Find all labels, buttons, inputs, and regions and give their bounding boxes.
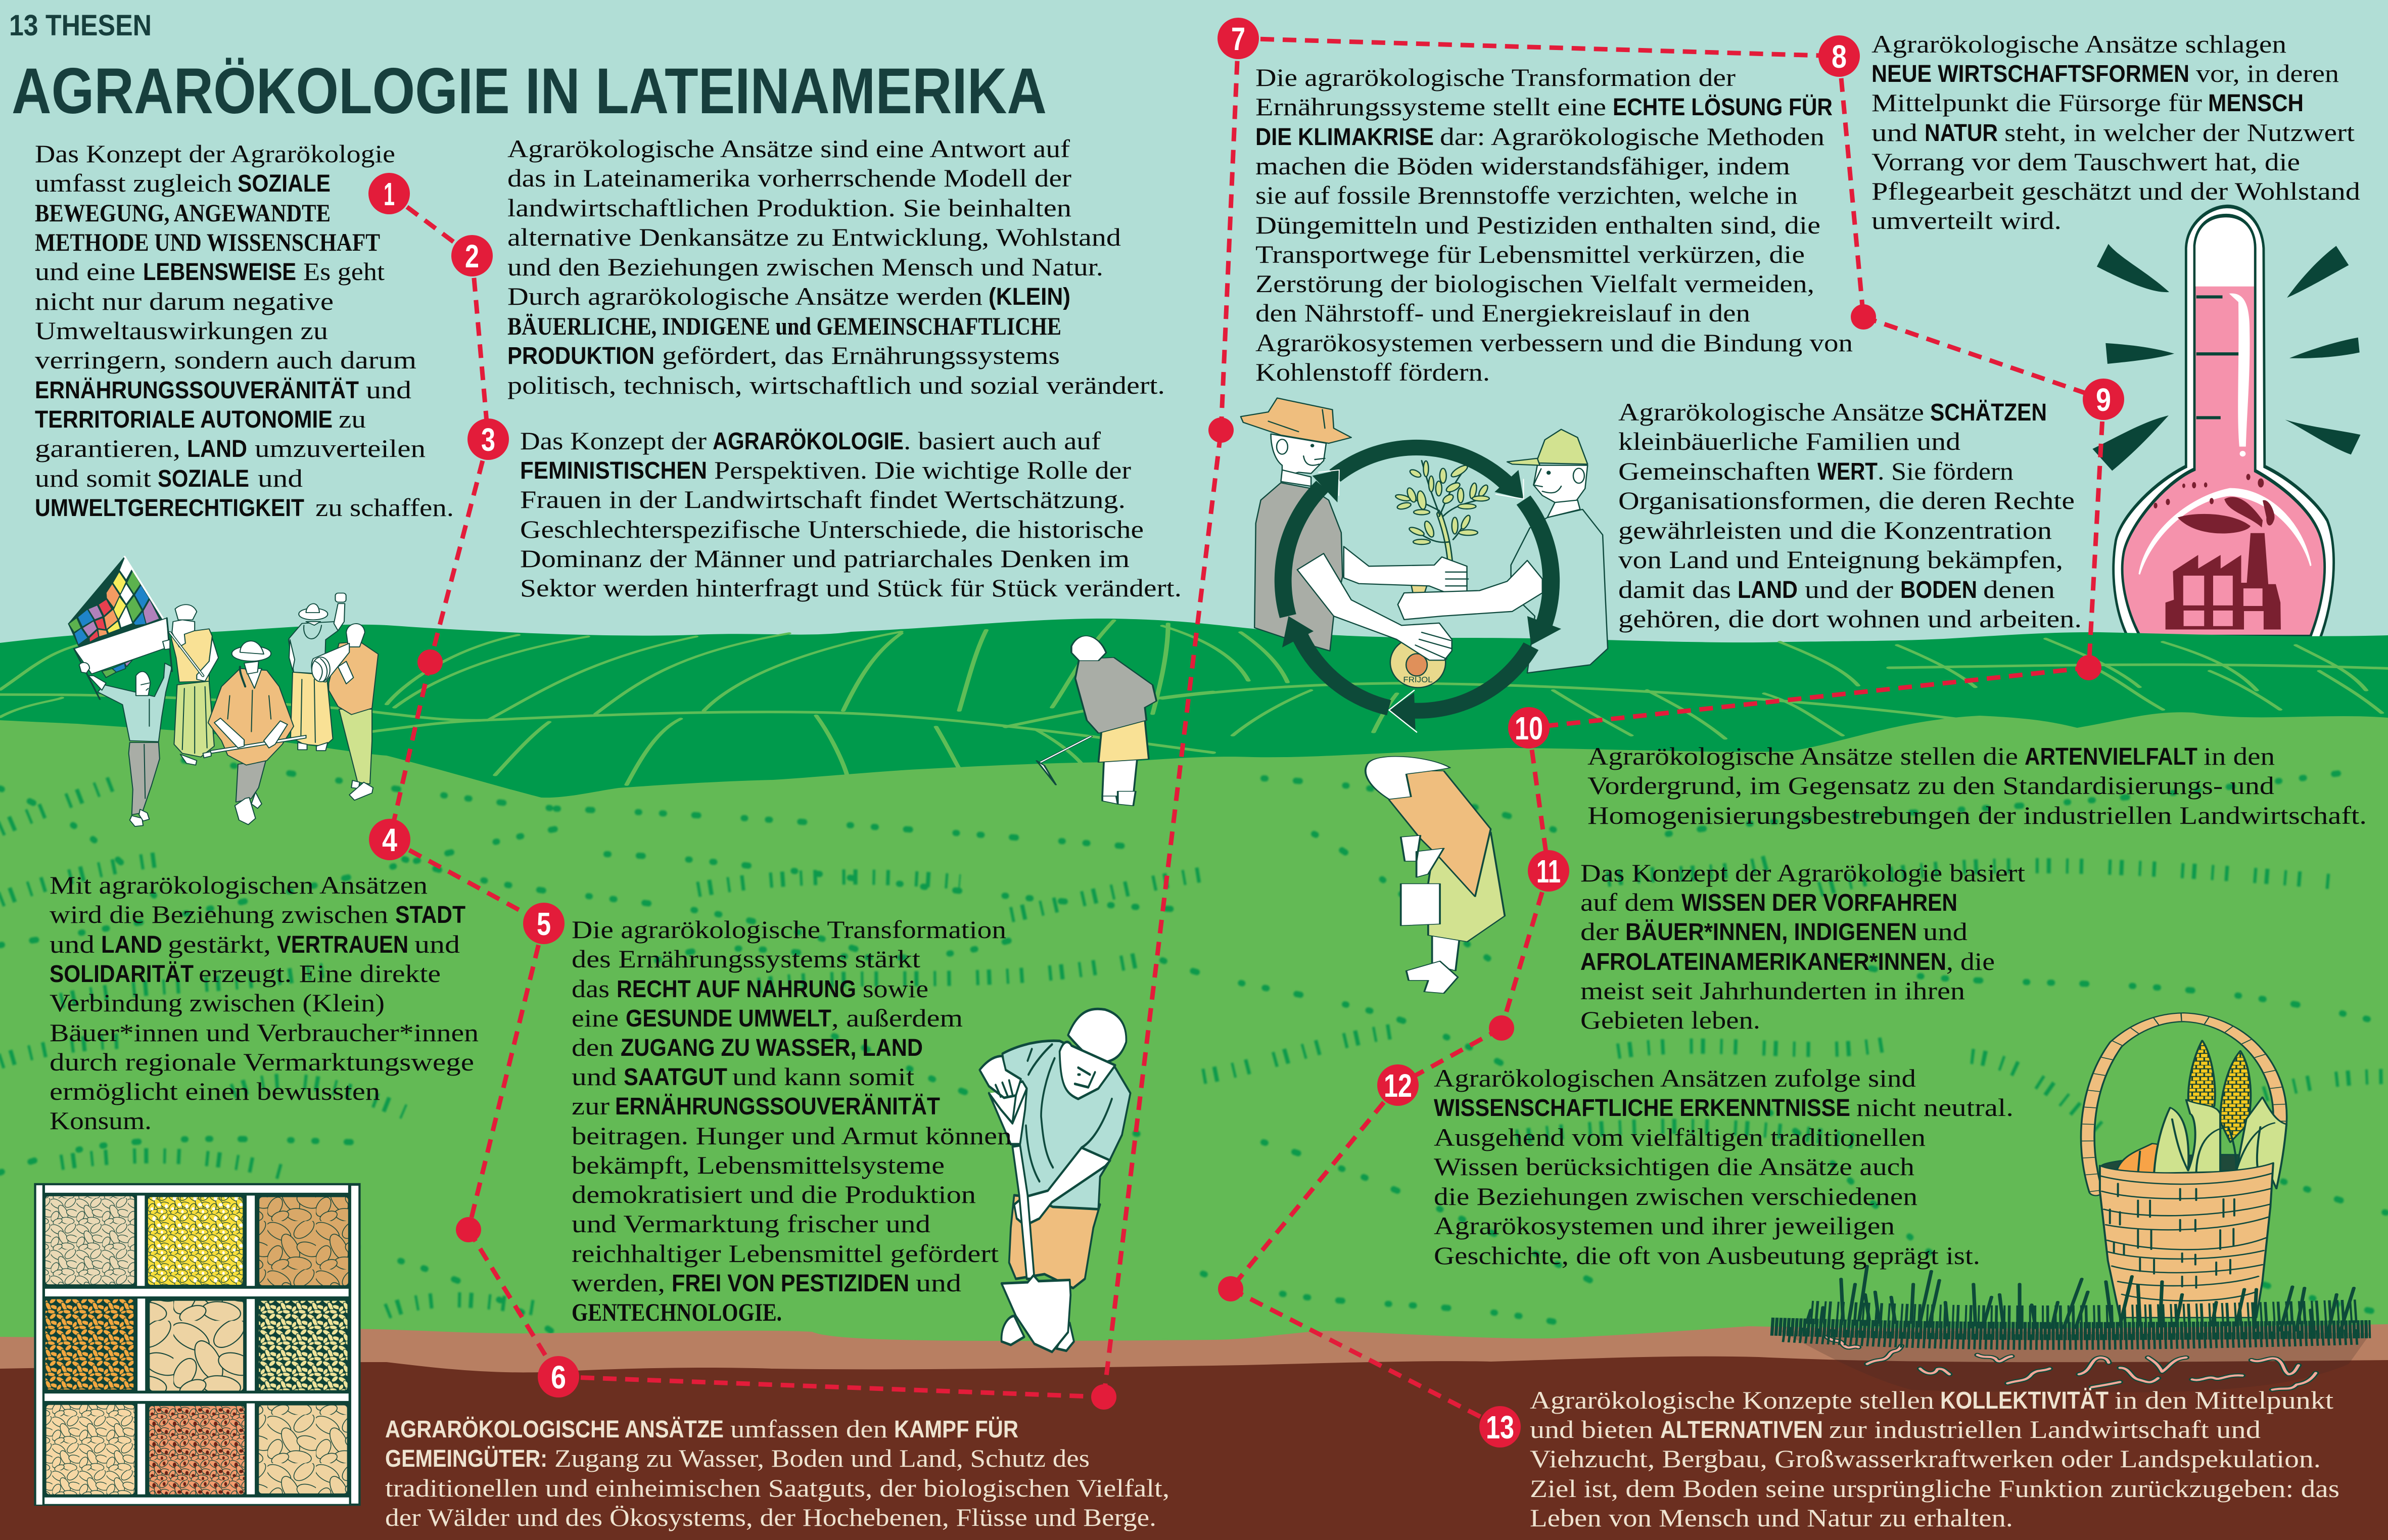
text block: thesis 7: Zerstörung der biologischen Vielfalt vermeiden, bbox=[1255, 269, 1814, 298]
text block: thesis 5: ZUGANG ZU WASSER, LAND bbox=[621, 1035, 923, 1061]
banner bbox=[74, 618, 172, 699]
text block: thesis 5: werden, bbox=[572, 1269, 665, 1297]
farmer right bbox=[1507, 430, 1608, 673]
text block: thesis 11: der bbox=[1580, 917, 1619, 946]
text block: thesis 9: kleinbäuerliche Familien und bbox=[1618, 427, 1960, 455]
illustration: woman with bucket bbox=[1366, 757, 1505, 993]
text block: thesis 6: KAMPF FÜR bbox=[894, 1416, 1018, 1443]
text block: thesis 1: verringern, sondern auch darum bbox=[35, 346, 416, 374]
text block: thesis 9: Agrarökologische Ansätze bbox=[1618, 398, 1924, 426]
text block: thesis 5: den bbox=[572, 1033, 614, 1061]
background: dark green hill field bbox=[0, 619, 2388, 859]
illustration: seed box bbox=[34, 1183, 361, 1506]
person: woman with staff bbox=[170, 604, 218, 765]
text block: thesis 7: sie auf fossile Brennstoffe verzichten, welche in bbox=[1255, 181, 1798, 209]
text block: thesis 12: Geschichte, die oft von Ausbeutung geprägt ist. bbox=[1434, 1241, 1980, 1270]
illustration: basket with corn and squash, grass and worms bbox=[1771, 1017, 2371, 1392]
text block: thesis 7 bbox=[1255, 63, 1853, 386]
text block: thesis 9 bbox=[1618, 398, 2082, 633]
text block: thesis 13: Ziel ist, dem Boden seine ursprüngliche Funktion zurückzugeben: das bbox=[1530, 1474, 2339, 1503]
soil patch bbox=[1779, 1330, 2371, 1392]
text block: thesis 8: Pflegearbeit geschätzt und der Wohlstand bbox=[1871, 177, 2360, 205]
number badge 4 bbox=[369, 819, 410, 860]
text block: thesis 5: und bbox=[916, 1269, 961, 1297]
text block: thesis 3: AGRARÖKOLOGIE bbox=[713, 428, 904, 455]
text block: thesis 5: das bbox=[572, 974, 610, 1003]
text block: thesis 7: Agrarökosystemen verbessern und die Bindung von bbox=[1255, 329, 1853, 357]
number badge 9 bbox=[2083, 379, 2124, 420]
text block: thesis 4: und bbox=[50, 930, 95, 958]
number badge 9: 9 bbox=[2096, 382, 2111, 418]
text block: thesis 7: ECHTE LÖSUNG FÜR bbox=[1613, 94, 1833, 121]
text block: thesis 5: RECHT AUF NAHRUNG bbox=[617, 976, 856, 1003]
text block: thesis 2: (KLEIN) bbox=[989, 284, 1070, 310]
text block: thesis 11: Gebieten leben. bbox=[1580, 1006, 1760, 1034]
grass tufts bbox=[1771, 1266, 2371, 1342]
text block: thesis 10: in den bbox=[2204, 742, 2275, 770]
kicker: 13 Thesen: 13 THESEN bbox=[9, 9, 152, 42]
text block: thesis 1: nicht nur darum negative bbox=[35, 287, 334, 315]
dashed route connecting theses bbox=[389, 38, 2103, 1427]
text block: thesis 3: Sektor werden hinterfragt und Stück für Stück verändert. bbox=[520, 574, 1182, 602]
text block: thesis 6: GEMEINGÜTER: bbox=[385, 1445, 547, 1472]
text block: thesis 5: ERNÄHRUNGSSOUVERÄNITÄT bbox=[615, 1093, 940, 1120]
text block: thesis 8: Agrarökologische Ansätze schlagen bbox=[1871, 30, 2286, 58]
text block: thesis 12 bbox=[1434, 1064, 2014, 1270]
text block: thesis 9: SCHÄTZEN bbox=[1930, 399, 2047, 426]
illustration: man with shovel bbox=[979, 1009, 1131, 1352]
text block: thesis 9: denen bbox=[1983, 575, 2055, 603]
text block: thesis 5: GESUNDE UMWELT bbox=[626, 1005, 831, 1032]
text block: thesis 13: ALTERNATIVEN bbox=[1660, 1417, 1823, 1443]
text block: thesis 1 bbox=[35, 139, 454, 522]
text block: thesis 6: umfassen den bbox=[730, 1415, 887, 1443]
text block: thesis 7: Ernährungssysteme stellt eine bbox=[1255, 92, 1606, 121]
text block: thesis 4: wird die Beziehung zwischen bbox=[50, 900, 388, 928]
text block: thesis 3: . basiert auch auf bbox=[904, 427, 1101, 455]
text block: thesis 7: den Nährstoff- und Energiekreislauf in den bbox=[1255, 299, 1750, 327]
text block: thesis 4: durch regionale Vermarktungswege bbox=[50, 1048, 474, 1076]
text block: thesis 7: Transportwege für Lebensmittel verkürzen, die bbox=[1255, 240, 1805, 268]
text block: thesis 2: gefördert, das Ernährungssystems bbox=[662, 341, 1060, 369]
seed bag bbox=[1390, 570, 1445, 687]
route waypoints bbox=[417, 304, 2101, 1410]
text block: thesis 5: Die agrarökologische Transformation bbox=[572, 915, 1006, 944]
text block: thesis 5: reichhaltiger Lebensmittel gefördert bbox=[572, 1239, 999, 1268]
text block: thesis 1: und bbox=[258, 464, 303, 492]
text block: thesis 4: Konsum. bbox=[50, 1106, 152, 1135]
text block: thesis 5: FREI VON PESTIZIDEN bbox=[672, 1270, 909, 1297]
text block: thesis 7: Düngemitteln und Pestiziden enthalten sind, die bbox=[1255, 211, 1820, 239]
field furrow lines bbox=[0, 621, 2388, 785]
text block: thesis 11: meist seit Jahrhunderten in ihren bbox=[1580, 976, 1965, 1005]
text block: thesis 3: Perspektiven. Die wichtige Rolle der bbox=[714, 456, 1131, 484]
number badge 13: 13 bbox=[1486, 1409, 1514, 1445]
text block: thesis 1: Es geht bbox=[303, 257, 385, 286]
sapling bbox=[1395, 460, 1489, 568]
text block: thesis 1: und somit bbox=[35, 464, 151, 492]
text block: thesis 1: BEWEGUNG, ANGEWANDTE bbox=[35, 199, 331, 227]
text block: thesis 6: AGRARÖKOLOGISCHE ANSÄTZE bbox=[385, 1416, 724, 1443]
text block: thesis 8: vor, in deren bbox=[2196, 59, 2339, 87]
number badge 7: 7 bbox=[1231, 21, 1245, 57]
illustration: two farmers exchanging sapling and seed bag bbox=[1241, 398, 1608, 732]
text block: thesis 1: ERNÄHRUNGSSOUVERÄNITÄT bbox=[35, 377, 359, 404]
text block: thesis 2: das in Lateinamerika vorherrschende Modell der bbox=[507, 164, 1071, 192]
text block: thesis 4: gestärkt, bbox=[168, 930, 271, 958]
person: man with megaphone bbox=[311, 624, 378, 800]
text block: thesis 10: Vordergrund, im Gegensatz zu den Standardisierungs- und bbox=[1587, 771, 2274, 800]
text block: thesis 13: in den Mittelpunkt bbox=[2115, 1386, 2333, 1414]
text block: thesis 8 bbox=[1871, 30, 2360, 235]
number badge 3: 3 bbox=[481, 422, 495, 458]
number badge 6 bbox=[538, 1356, 579, 1397]
text block: thesis 2: alternative Denkansätze zu Entwicklung, Wohlstand bbox=[507, 223, 1121, 251]
number badge 6: 6 bbox=[551, 1359, 566, 1395]
clasped hands and arms bbox=[1297, 546, 1542, 660]
text block: thesis 6: der Wälder und des Ökosystems, der Hochebenen, Flüsse und Berge. bbox=[385, 1503, 1156, 1531]
text block: thesis 2: PRODUKTION bbox=[507, 343, 654, 369]
text block: thesis 9: Organisationsformen, die deren Rechte bbox=[1618, 486, 2075, 515]
text block: thesis 1: zu bbox=[339, 405, 366, 433]
text block: thesis 6 bbox=[385, 1415, 1169, 1531]
text block: thesis 9: gewährleisten und die Konzentration bbox=[1618, 516, 2052, 544]
text block: thesis 3: FEMINISTISCHEN bbox=[520, 457, 707, 484]
number badge 7 bbox=[1218, 18, 1259, 59]
text block: thesis 2 bbox=[507, 134, 1165, 399]
text block: thesis 2: BÄUERLICHE, INDIGENE und GEMEINSCHAFTLICHE bbox=[507, 312, 1061, 340]
text block: thesis 7: Kohlenstoff fördern. bbox=[1255, 358, 1490, 386]
text block: thesis 12: nicht neutral. bbox=[1856, 1093, 2014, 1122]
text block: thesis 8: MENSCH bbox=[2208, 90, 2304, 117]
text block: thesis 9: Gemeinschaften bbox=[1618, 457, 1810, 485]
text block: thesis 4: VERTRAUEN bbox=[277, 931, 408, 958]
text block: thesis 1: METHODE UND WISSENSCHAFT bbox=[35, 228, 380, 256]
text block: thesis 2: Agrarökologische Ansätze sind eine Antwort auf bbox=[507, 134, 1070, 163]
text block: thesis 5: bekämpft, Lebensmittelsysteme bbox=[572, 1151, 945, 1179]
text block: thesis 1: umzuverteilen bbox=[255, 434, 426, 462]
text block: thesis 5: SAATGUT bbox=[624, 1064, 727, 1091]
text block: thesis 1: und eine bbox=[35, 257, 135, 286]
text block: thesis 10 bbox=[1587, 742, 2367, 829]
text block: thesis 1: und bbox=[366, 376, 411, 404]
text block: thesis 8: NATUR bbox=[1925, 120, 1998, 147]
icon: cycle arrows bbox=[1282, 447, 1561, 732]
text block: thesis 3: Geschlechterspezifische Unterschiede, die historische bbox=[520, 515, 1144, 543]
text block: thesis 13: KOLLEKTIVITÄT bbox=[1940, 1387, 2109, 1414]
illustration: thermometer with factory bbox=[2092, 206, 2361, 639]
text block: thesis 4: ermöglicht einen bewussten bbox=[50, 1077, 380, 1105]
text block: thesis 7: Die agrarökologische Transformation der bbox=[1255, 63, 1736, 91]
text block: thesis 5: und Vermarktung frischer und bbox=[572, 1209, 930, 1238]
text block: thesis 9: und der bbox=[1805, 575, 1893, 603]
text block: thesis 9: BODEN bbox=[1900, 577, 1977, 603]
text block: thesis 4: STADT bbox=[395, 902, 465, 928]
text block: thesis 12: Agrarökologischen Ansätzen zufolge sind bbox=[1434, 1064, 1916, 1092]
basket bbox=[2088, 1017, 2286, 1318]
person: woman with raised fist bbox=[289, 593, 346, 751]
text block: thesis 8: steht, in welcher der Nutzwert bbox=[2004, 118, 2355, 147]
text block: thesis 13: Agrarökologische Konzepte stellen bbox=[1530, 1386, 1934, 1414]
text block: thesis 5 bbox=[572, 915, 1012, 1326]
number badge 8 bbox=[1818, 35, 1860, 77]
illustration: woman with hoe bbox=[1037, 636, 1156, 806]
text block: thesis 7: dar: Agrarökologische Methoden bbox=[1440, 122, 1824, 151]
text block: thesis 5: sowie bbox=[863, 974, 928, 1003]
text block: thesis 10: Homogenisierungsbestrebungen der industriellen Landwirtschaft. bbox=[1587, 801, 2367, 829]
text block: thesis 12: WISSENSCHAFTLICHE ERKENNTNISSE bbox=[1434, 1095, 1850, 1122]
text block: thesis 1: LEBENSWEISE bbox=[143, 259, 296, 286]
text block: thesis 1: garantieren, bbox=[35, 434, 180, 462]
text block: thesis 12: die Beziehungen zwischen verschiedenen bbox=[1434, 1182, 1917, 1210]
title: AGRARÖKOLOGIE IN LATEINAMERIKA bbox=[12, 55, 1047, 127]
text block: thesis 1: LAND bbox=[187, 436, 247, 462]
text block: thesis 11 bbox=[1580, 859, 2025, 1034]
number badge 2 bbox=[451, 235, 493, 276]
text block: thesis 5: beitragen. Hunger und Armut können bbox=[572, 1122, 1012, 1150]
farmer left bbox=[1241, 398, 1351, 651]
number badge 11: 11 bbox=[1536, 853, 1561, 890]
text block: thesis 1: SOZIALE bbox=[238, 170, 331, 197]
text block: thesis 5: und kann somit bbox=[732, 1062, 914, 1091]
text block: thesis 4: LAND bbox=[101, 931, 162, 958]
seed bag: FRIJOL bbox=[1403, 675, 1433, 684]
text block: thesis 6: traditionellen und einheimischen Saatguts, der biologischen Vielfalt, bbox=[385, 1474, 1169, 1502]
text block: thesis 4: Verbindung zwischen (Klein) bbox=[50, 989, 385, 1017]
number badge 1: 1 bbox=[384, 176, 395, 212]
text block: thesis 10: ARTENVIELFALT bbox=[2025, 743, 2197, 770]
number badge 8: 8 bbox=[1832, 38, 1847, 75]
number badge 5 bbox=[523, 903, 565, 944]
text block: thesis 2: und den Beziehungen zwischen Mensch und Natur. bbox=[507, 253, 1103, 281]
number badge 11 bbox=[1528, 850, 1569, 892]
text block: thesis 11: Das Konzept der Agrarökologie basiert bbox=[1580, 859, 2025, 887]
person: banner carrier bbox=[88, 663, 172, 826]
number badge 12: 12 bbox=[1384, 1067, 1412, 1104]
text block: thesis 5: demokratisiert und die Produktion bbox=[572, 1180, 976, 1208]
text block: thesis 8: Mittelpunkt die Fürsorge für bbox=[1871, 88, 2202, 117]
text block: thesis 8: NEUE WIRTSCHAFTSFORMEN bbox=[1871, 61, 2189, 87]
text block: thesis 11: , die bbox=[1946, 947, 1995, 975]
text block: thesis 7: machen die Böden widerstandsfähiger, indem bbox=[1255, 152, 1790, 180]
text block: thesis 12: Agrarökosystemen und ihrer jeweiligen bbox=[1434, 1211, 1895, 1240]
text block: thesis 1: zu schaffen. bbox=[315, 493, 454, 522]
text block: thesis 2: politisch, technisch, wirtschaftlich und sozial verändert. bbox=[507, 371, 1165, 399]
text block: thesis 5: zur bbox=[572, 1092, 610, 1120]
text block: thesis 12: Wissen berücksichtigen die Ansätze auch bbox=[1434, 1152, 1914, 1181]
background: tan topsoil band bbox=[0, 1324, 2388, 1415]
text block: thesis 4: Mit agrarökologischen Ansätzen bbox=[50, 871, 428, 899]
text block: thesis 1: TERRITORIALE AUTONOMIE bbox=[35, 406, 333, 433]
text block: thesis 4: und bbox=[414, 930, 460, 958]
text block: thesis 4 bbox=[50, 871, 479, 1135]
number badge 10: 10 bbox=[1515, 710, 1543, 746]
icon: heat rays bbox=[2092, 244, 2361, 471]
text block: thesis 8: und bbox=[1871, 118, 1917, 147]
number badge 4: 4 bbox=[382, 822, 397, 858]
number badge 1 bbox=[368, 173, 410, 214]
text block: thesis 9: damit das bbox=[1618, 575, 1731, 603]
text block: thesis 8: umverteilt wird. bbox=[1871, 206, 2062, 235]
text block: thesis 11: AFROLATEINAMERIKANER*INNEN bbox=[1580, 949, 1946, 975]
text block: thesis 2: landwirtschaftlichen Produktion. Sie beinhalten bbox=[507, 194, 1071, 222]
text block: thesis 1: Umweltauswirkungen zu bbox=[35, 316, 328, 345]
text block: thesis 11: auf dem bbox=[1580, 888, 1674, 916]
text block: thesis 1: SOZIALE bbox=[158, 465, 249, 492]
text block: thesis 10: Agrarökologische Ansätze stellen die bbox=[1587, 742, 2018, 770]
text block: thesis 5: GENTECHNOLOGIE. bbox=[572, 1298, 782, 1326]
text block: thesis 5: und bbox=[572, 1062, 617, 1091]
text block: thesis 12: Ausgehend vom vielfältigen traditionellen bbox=[1434, 1123, 1926, 1151]
number badge 3 bbox=[467, 418, 509, 460]
text block: thesis 5: eine bbox=[572, 1004, 619, 1032]
icon: wiphala flag bbox=[69, 556, 163, 678]
text block: thesis 3 bbox=[520, 427, 1182, 602]
text block: thesis 11: WISSEN DER VORFAHREN bbox=[1681, 890, 1957, 916]
text block: thesis 13: und bieten bbox=[1530, 1415, 1653, 1443]
text block: thesis 1: UMWELTGERECHTIGKEIT bbox=[35, 495, 304, 522]
text block: thesis 5: , außerdem bbox=[831, 1004, 963, 1032]
illustration: group of protesters with wiphala flag bbox=[69, 556, 378, 826]
text block: thesis 7: DIE KLIMAKRISE bbox=[1255, 124, 1434, 151]
text block: thesis 9: WERT bbox=[1817, 458, 1878, 485]
number badge 2: 2 bbox=[465, 238, 479, 274]
worms bbox=[1827, 1337, 2316, 1390]
text block: thesis 6: Zugang zu Wasser, Boden und Land, Schutz des bbox=[554, 1444, 1090, 1472]
number badge 5: 5 bbox=[537, 906, 551, 942]
seed cells bbox=[45, 1196, 348, 1495]
text block: thesis 1: umfasst zugleich bbox=[35, 169, 232, 197]
text block: thesis 9: gehören, die dort wohnen und arbeiten. bbox=[1618, 604, 2082, 633]
text block: thesis 9: LAND bbox=[1738, 577, 1798, 603]
background: light green meadow bbox=[0, 712, 2388, 1365]
text block: thesis 8: Vorrang vor dem Tauschwert hat, die bbox=[1871, 148, 2300, 176]
text block: thesis 13 bbox=[1530, 1386, 2339, 1532]
person: man in poncho bbox=[208, 641, 306, 825]
text block: thesis 11: und bbox=[1923, 917, 1968, 946]
text block: thesis 3: Frauen in der Landwirtschaft findet Wertschätzung. bbox=[520, 485, 1126, 514]
text block: thesis 9: . Sie fördern bbox=[1878, 457, 2014, 485]
text block: thesis 4: SOLIDARITÄT bbox=[50, 961, 194, 988]
text block: thesis 5: des Ernährungssystems stärkt bbox=[572, 945, 920, 973]
text block: thesis 13: Viehzucht, Bergbau, Großwasserkraftwerken oder Landspekulation. bbox=[1530, 1444, 2321, 1473]
text block: thesis 9: von Land und Enteignung bekämpfen, bbox=[1618, 545, 2063, 574]
text block: thesis 13: Leben von Mensch und Natur zu erhalten. bbox=[1530, 1504, 2013, 1532]
text block: thesis 3: Dominanz der Männer und patriarchales Denken im bbox=[520, 544, 1130, 573]
background: dark soil bbox=[0, 1357, 2388, 1540]
text block: thesis 3: Das Konzept der bbox=[520, 427, 707, 455]
text block: thesis 4: Bäuer*innen und Verbraucher*innen bbox=[50, 1018, 479, 1047]
grass speckles on the meadow bbox=[0, 758, 2388, 1334]
text block: thesis 13: zur industriellen Landwirtschaft und bbox=[1829, 1415, 2261, 1443]
text block: thesis 2: Durch agrarökologische Ansätze werden bbox=[507, 282, 982, 310]
text block: thesis 1: Das Konzept der Agrarökologie bbox=[35, 139, 395, 168]
text block: thesis 11: BÄUER*INNEN, INDIGENEN bbox=[1625, 919, 1917, 946]
text block: thesis 4: erzeugt. Eine direkte bbox=[199, 959, 441, 988]
